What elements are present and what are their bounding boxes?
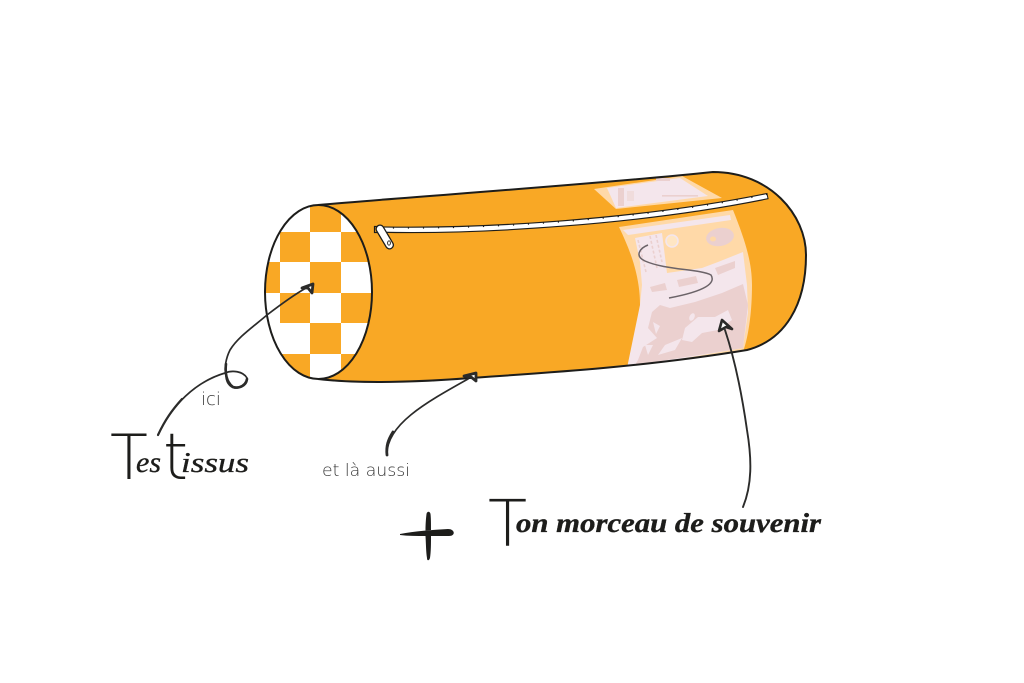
checkered end cap (264, 204, 373, 380)
stitched curve on patch (639, 245, 712, 298)
souvenir fabric patch: main part (619, 210, 752, 368)
heading: Tes tissus: t (163, 421, 188, 495)
heading: Tes tissus: issus (181, 448, 249, 479)
zipper pull (374, 226, 390, 245)
arrow: et là aussi to cushion side (387, 373, 476, 455)
cushion outline (318, 172, 806, 382)
cushion body (318, 172, 806, 382)
bolster cushion illustration (249, 172, 806, 385)
souvenir fabric patch: upper part (594, 176, 722, 209)
label: et là aussi: et là aussi (322, 461, 410, 481)
arrow: souvenir to patch (719, 320, 750, 507)
heading: Tes tissus: es (136, 446, 161, 479)
label: ici: ici (201, 389, 221, 410)
heading: Ton morceau de souvenir: on morceau de souvenir (516, 508, 822, 538)
heading: Tes tissus: T (110, 421, 148, 494)
arrow: ici to end cap (158, 284, 313, 435)
heading: Ton morceau de souvenir: T (488, 488, 527, 562)
zipper (374, 194, 768, 245)
plus sign (400, 512, 454, 560)
